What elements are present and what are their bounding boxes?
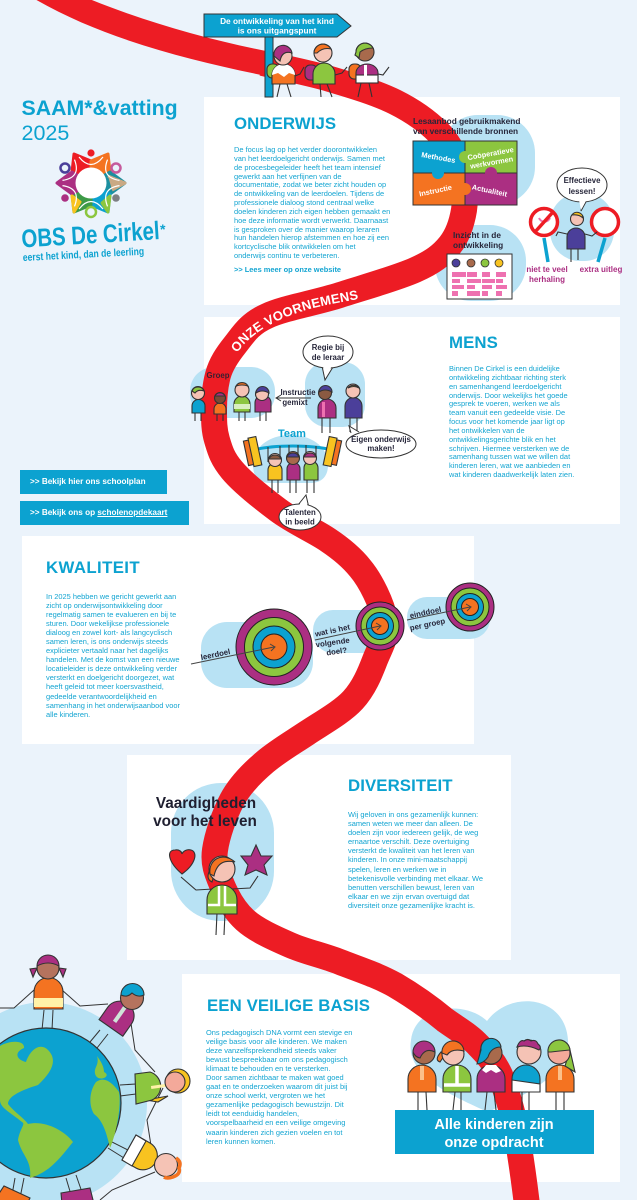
inzicht in de ontwikkeling: Inzicht in de	[453, 230, 501, 240]
text: onderwijs: hun handelen hierop afstemmen en hoe zij een	[234, 233, 389, 242]
child right 1 head	[120, 984, 144, 1010]
text: kwaliteit: locatieleider is deze ontwikkeling verder	[46, 664, 177, 673]
text: een veilige basis: voorspelbaarheid en een veilige omgeving	[206, 1118, 345, 1127]
signpost	[204, 14, 351, 97]
text: diversiteit: samen weten we meer dan alleen. De	[348, 819, 473, 828]
signpost: De ontwikkeling van het kind	[220, 16, 334, 26]
bubble: regie bij de leraar: de leraar	[312, 353, 344, 362]
puzzle: van verschillende bronnen	[413, 126, 518, 136]
target: leerdoel: leerdoel	[200, 647, 231, 662]
target: leerdoel	[191, 609, 312, 685]
text: een veilige basis: veilige basis voor alle kinderen. We maken	[206, 1037, 347, 1046]
text: een veilige basis: Door samen zichtbaar te maken wat goed	[206, 1073, 344, 1082]
text: mens: en samenhangend leerdoelgericht	[449, 382, 561, 391]
text: een veilige basis: gaat en te onderzoeken waarom dit juist bij	[206, 1082, 347, 1091]
text: mens: gesprek te voeren, werken we als	[449, 399, 560, 408]
text: mens: schrijven. Hiermee versterken we de	[449, 444, 569, 453]
panel: diversiteit	[127, 755, 511, 960]
child right 3	[122, 1135, 180, 1178]
target: volgende doel: volgende	[315, 636, 351, 649]
text: diversiteit: diversiteit onze gezamenlijke kracht is.	[348, 901, 475, 910]
button: scholenopdekaart: >> Bekijk ons op scholenopdekaart	[30, 508, 167, 517]
text: onderwijs: van het leerdoelgericht onderwijs. Samen met	[234, 154, 385, 163]
puzzle: Instructie	[418, 183, 453, 198]
text: diversiteit: ernaartoe verschilt. Deze overtuiging	[348, 837, 469, 846]
button: schoolplan: >> Bekijk hier ons schoolplan	[30, 477, 146, 486]
target: volgende doel: wat is het	[313, 622, 351, 639]
text: mens: focus voor het komende jaar ligt op	[449, 417, 565, 426]
heading: diversiteit: DIVERSITEIT	[348, 776, 453, 795]
globe body	[0, 1028, 121, 1178]
text: diversiteit: betekenisvolle verbinding met elkaar. We	[348, 874, 483, 883]
inzicht in de ontwikkeling	[447, 230, 512, 299]
panel: mens	[204, 317, 620, 524]
text: kwaliteit: heeft geleid tot meer koersvastheid,	[46, 682, 164, 691]
target: einddoel	[407, 583, 494, 633]
text: een veilige basis: onze school werkt, vergroten we het	[206, 1091, 325, 1100]
teachers	[318, 384, 362, 433]
logo asterisk: *	[160, 221, 166, 237]
child right 1	[99, 995, 140, 1036]
bubble: talenten in beeld: Talenten	[284, 508, 316, 517]
text: een veilige basis: klimaat te behouden en te versterken.	[206, 1064, 330, 1073]
sign labels: extra uitleg	[580, 265, 622, 274]
bubble: talenten in beeld: in beeld	[285, 518, 315, 526]
effectieve lessen	[526, 168, 622, 284]
text: een veilige basis: gezamenlijke pedagogisch bewustzijn. Dit	[206, 1100, 344, 1109]
heading: vaardigheden: voor het leven	[153, 813, 257, 830]
target: einddoel: einddoel	[409, 605, 442, 620]
globe	[0, 955, 190, 1200]
globe halo	[0, 1002, 147, 1200]
logo	[21, 149, 166, 264]
text: kwaliteit: samen leren, is ons onderwijs steeds	[46, 637, 168, 646]
group kids	[192, 371, 271, 421]
panel: onderwijs	[204, 97, 620, 305]
text: kwaliteit	[46, 592, 180, 719]
puzzle: Coöperatieve	[467, 145, 514, 162]
bubble: eigen onderwijs maken	[346, 426, 416, 458]
text: onderwijs: professionele dialoog stond centraal welke	[234, 198, 374, 207]
text: diversiteit: kinderen. In onze mini-maatschappij	[348, 855, 467, 864]
instructie gemixt: gemixt	[282, 398, 308, 407]
text: onderwijs: hoe deze informatie wordt verwerkt. Daarnaast	[234, 216, 388, 225]
puzzle: Actualiteit	[471, 182, 508, 199]
continents	[0, 1042, 120, 1178]
bubble: lessen!	[569, 187, 595, 196]
text: onderwijs: gewerkt aan het verfijnen van de	[234, 172, 342, 181]
puzzle	[413, 116, 520, 205]
text: diversiteit: Wij geloven in ons gezamenlijk kunnen:	[348, 810, 478, 819]
text: mens: team vanuit een gedeelde visie. De	[449, 408, 565, 417]
banner: alle kinderen: onze opdracht	[444, 1135, 544, 1151]
title	[22, 96, 178, 145]
text: mens: onderwijs. Door wekelijks het goede	[449, 391, 568, 400]
text: onderwijs: de ontwikkeling van de leerdoelen. Tijdens de	[234, 189, 384, 198]
signs	[530, 208, 618, 262]
button: schoolplan	[20, 470, 167, 494]
children on heart	[408, 1038, 575, 1110]
instructie gemixt: Instructie	[280, 388, 316, 397]
text: mens: Binnen De Cirkel is een duidelijke	[449, 364, 560, 373]
text: een veilige basis: deze vanzelfsprekendheid steeds vaker	[206, 1046, 337, 1055]
sign labels	[526, 265, 622, 284]
text: een veilige basis: leidt tot eenduidig handelen,	[206, 1109, 299, 1118]
text: een veilige basis: Ons pedagogisch DNA vormt een stevige en	[206, 1028, 352, 1037]
text: kwaliteit: explicieter vertaald naar het dagelijks	[46, 646, 168, 655]
bubble: eigen onderwijs maken: Eigen onderwijs	[351, 435, 412, 444]
text: mens: het ontwikkelen van de	[449, 426, 525, 435]
text: onderwijs	[234, 145, 390, 260]
text: mens	[449, 364, 574, 479]
kids at signpost	[267, 43, 389, 97]
text: kwaliteit: gedeelde verantwoordelijkheid en	[46, 692, 157, 701]
team label: Team	[278, 428, 306, 440]
banner: alle kinderen: Alle kinderen zijn	[434, 1117, 554, 1133]
heading: vaardigheden: Vaardigheden	[156, 795, 256, 812]
target: volgende doel: doel?	[326, 646, 348, 657]
logo tagline: eerst het kind, dan de leerling	[23, 246, 145, 264]
button: scholenopdekaart	[20, 501, 189, 525]
blobs background	[171, 115, 614, 1112]
text: kwaliteit: zicht op onderwijsontwikkeling door	[46, 601, 163, 610]
bubble: regie bij de leraar: Regie bij	[312, 343, 344, 352]
year: 2025	[22, 121, 69, 145]
text: onderwijs: onderwijs continu te verbeteren.	[234, 251, 339, 260]
text: kwaliteit: sturen. Door wekelijkse professionele	[46, 619, 169, 628]
text: kwaliteit: regelmatig samen te evalueren en bij te	[46, 610, 176, 619]
children bottom edge	[0, 1186, 94, 1200]
bubble: eigen onderwijs maken: maken!	[367, 444, 395, 453]
text: kwaliteit: samenhang in het onderwijsaanbod voor	[46, 701, 180, 710]
text: kwaliteit: In 2025 hebben we gericht gewerkt aan	[46, 592, 176, 601]
text: kwaliteit: versterkt en doelgericht doorgezet, wat	[46, 673, 174, 682]
text: een veilige basis: bewust bespreekbaar om ons pedagogisch	[206, 1055, 348, 1064]
link: lees meer: >> Lees meer op onze website	[234, 265, 341, 274]
bubble: talenten in beeld	[279, 495, 321, 530]
sign labels: niet te veel	[526, 265, 568, 274]
text: mens: samenhang tussen wat we willen dat	[449, 452, 570, 461]
logo name: OBS De Cirkel	[21, 216, 160, 253]
bubble: Effectieve	[564, 176, 601, 185]
panel: een veilige basis	[182, 974, 620, 1182]
teacher	[556, 212, 597, 262]
heading: mens: MENS	[449, 333, 498, 352]
sign labels: herhaling	[529, 275, 565, 284]
heading: vaardigheden	[153, 795, 257, 830]
title line: SAAM*&vatting	[22, 96, 178, 120]
bubble: regie bij de leraar	[303, 336, 353, 380]
text: kwaliteit: handelen. Met de komst van een nieuwe	[46, 655, 180, 664]
text: mens: ontwikkelingsgerichte blik en het	[449, 435, 556, 444]
puzzle: Methodes	[421, 150, 456, 165]
label: Lesaanbod gebruikmakend	[413, 116, 520, 126]
instructie gemixt	[276, 388, 316, 407]
banner: alle kinderen	[395, 1110, 594, 1154]
signpost: is ons uitgangspunt	[238, 26, 317, 36]
group kids: Groep	[207, 371, 230, 380]
text: diversiteit	[348, 810, 483, 910]
text: onderwijs: is gesproken over de manier waarop leraren	[234, 225, 380, 234]
text: diversiteit: spelen, leren en werken we in	[348, 865, 446, 874]
text: onderwijs: De focus lag op het verder doorontwikkelen	[234, 145, 377, 154]
bubble	[557, 168, 607, 211]
text: mens: ontwikkeling zichtbaar richting sterk	[449, 373, 566, 382]
ribbon	[33, 0, 527, 1200]
text: een veilige basis	[206, 1028, 352, 1146]
heading: een veilige basis: EEN VEILIGE BASIS	[207, 996, 370, 1015]
text: diversiteit: elkaar en we zijn ervan overtuigd dat	[348, 892, 469, 901]
text: onderwijs: doelen kinderen zich eigen hebben gemaakt en	[234, 207, 390, 216]
child right 2	[135, 1069, 190, 1104]
text: diversiteit: versterkt de kwaliteit van het leren van	[348, 846, 474, 855]
text: onderwijs: kortcyclische blik ontwikkelen om het	[234, 242, 356, 251]
target: einddoel: per groep	[409, 616, 446, 633]
text: kwaliteit: alle kinderen.	[46, 710, 90, 719]
panel: kwaliteit	[22, 536, 474, 744]
child with heart and star	[170, 845, 272, 935]
text: mens: kinderen leren, wat we aanbieden en	[449, 461, 571, 470]
logo star	[57, 154, 125, 212]
heading: kwaliteit: KWALITEIT	[46, 558, 140, 577]
text: diversiteit: doelen zijn voor iedereen gelijk, de weg	[348, 828, 478, 837]
child top	[30, 955, 66, 1009]
inzicht in de ontwikkeling: ontwikkeling	[453, 240, 503, 250]
text: mens: wat kinderen daadwerkelijk laten zien.	[449, 470, 574, 479]
text: een veilige basis: leren kunnen komen.	[206, 1137, 275, 1146]
puzzle: werkvormen	[468, 154, 514, 171]
barbell team	[243, 436, 342, 493]
text: diversiteit: benutten verschillen bewust, leren van	[348, 883, 475, 892]
ribbon label: ONZE VOORNEMENS	[232, 290, 358, 351]
text: onderwijs: documentatie, zodat we beter zicht houden op	[234, 180, 386, 189]
heading: onderwijs: ONDERWIJS	[234, 114, 336, 133]
text: kwaliteit: dialoog en zowel kort- als langcyclisch	[46, 628, 172, 637]
target: volgende doel	[313, 602, 404, 657]
text: een veilige basis: waarin kinderen zich gezien voelen en tot	[206, 1128, 342, 1137]
text: onderwijs: de procesbegeleider heeft het team intensief	[234, 163, 381, 172]
